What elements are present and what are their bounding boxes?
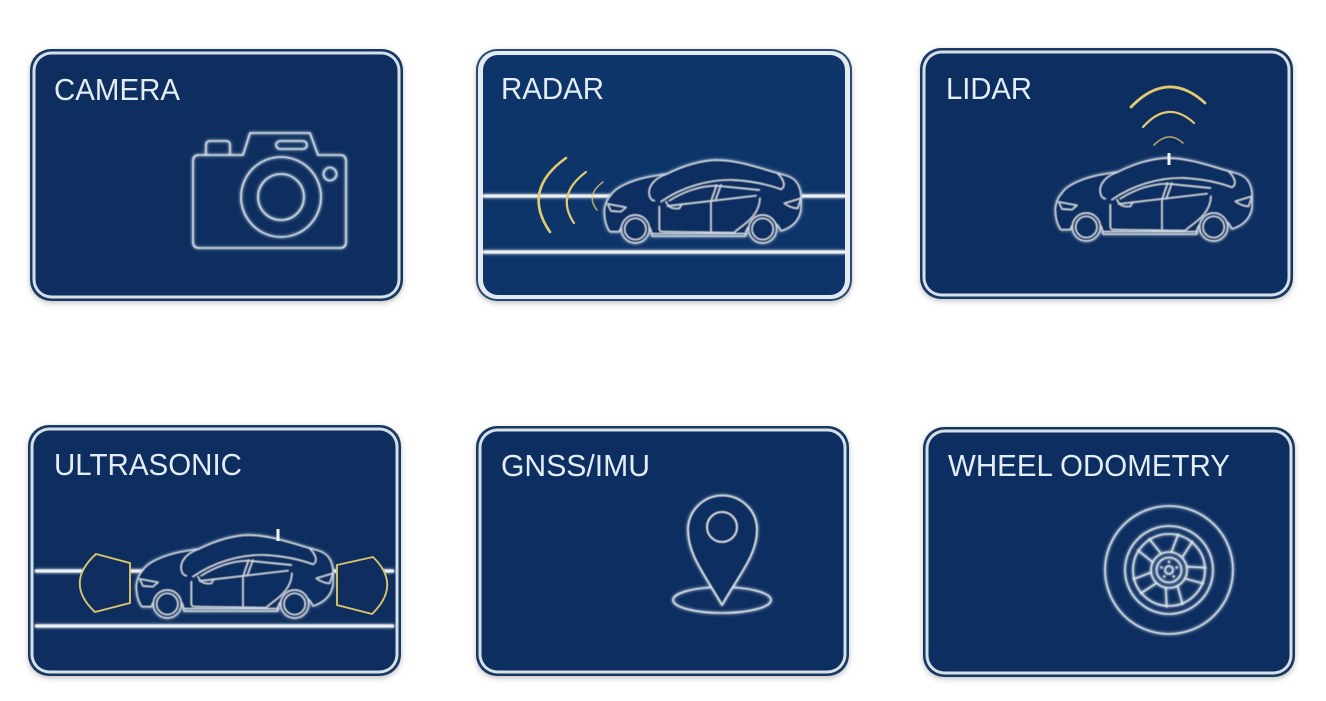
panel: radar [476, 49, 852, 301]
icon: radar waves [539, 158, 603, 232]
panel: ultrasonic [28, 425, 401, 676]
camera card frame [30, 49, 403, 301]
lidar card frame [920, 48, 1293, 299]
panel: gnss/imu [476, 426, 849, 676]
ultrasonic card frame [28, 425, 401, 676]
icon: car [1055, 158, 1252, 241]
icon: camera [193, 133, 346, 248]
road lines [483, 196, 846, 252]
icon: car [604, 160, 801, 243]
sensor mark [276, 529, 280, 541]
heading: ultrasonic: ULTRASONIC [54, 447, 242, 482]
road lines [35, 571, 394, 626]
icon: rear ultrasonic zone [80, 554, 130, 612]
icon: location pin [673, 496, 771, 613]
gnss card frame [476, 426, 849, 676]
panel: wheel odometry [923, 427, 1295, 677]
heading: lidar: LIDAR [946, 71, 1032, 106]
heading: radar: RADAR [501, 71, 604, 106]
icon: front ultrasonic zone [337, 557, 387, 614]
heading: gnss/imu: GNSS/IMU [501, 448, 650, 483]
sensor mark [1168, 153, 1170, 165]
panel: camera [30, 49, 403, 301]
icon: car [136, 535, 333, 618]
heading: wheel odometry: WHEEL ODOMETRY [948, 448, 1230, 483]
wheel card frame [923, 427, 1295, 677]
radar card frame [476, 49, 852, 301]
heading: camera: CAMERA [54, 72, 180, 107]
panel: lidar [920, 48, 1293, 299]
icon: wheel [1105, 506, 1233, 634]
icon: lidar waves [1131, 87, 1205, 145]
